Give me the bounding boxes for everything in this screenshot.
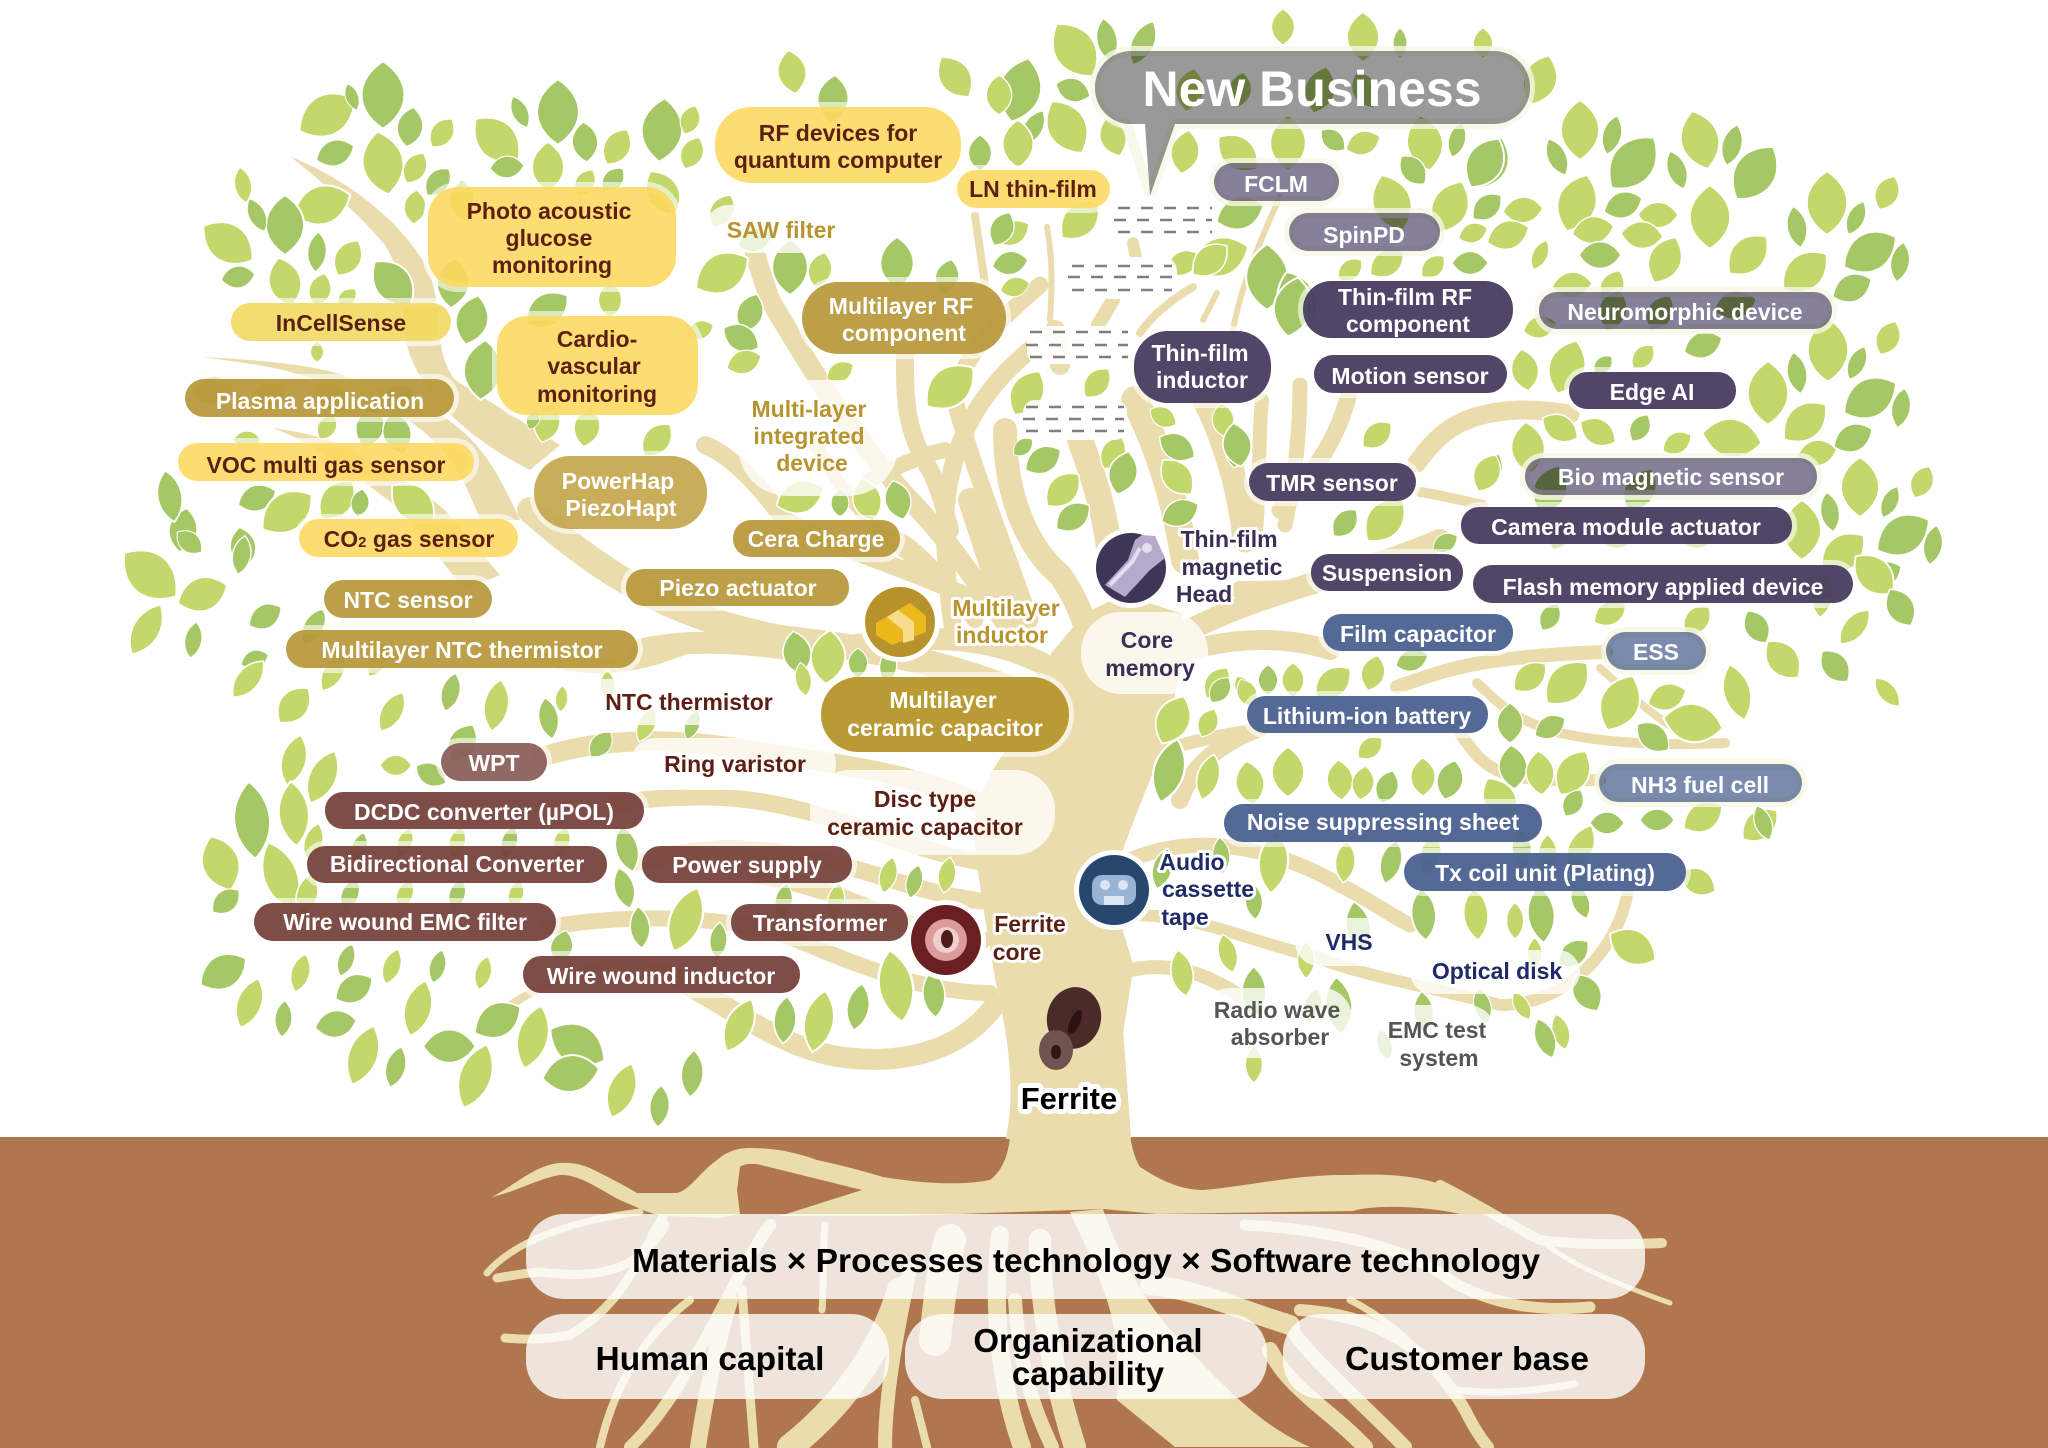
- label: Multi-layer integrated device: [751, 396, 867, 476]
- label: Multilayer RF component: Multilayer RF: [829, 293, 973, 319]
- label: Cardio-vascular monitoring: vascular: [547, 353, 641, 379]
- label: Suspension: Suspension: [1322, 560, 1452, 586]
- label: thin-film magnetic head: Thin-film: [1180, 526, 1278, 552]
- label: audio cassette tape: cassette: [1162, 876, 1254, 902]
- panel: human capital: Human capital: [596, 1340, 824, 1377]
- label: WPT: [441, 743, 547, 781]
- centre leaves: [1001, 363, 1053, 423]
- label: Thin-film RF component: [1303, 281, 1513, 338]
- label: DCDC converter: DCDC converter (µPOL): [354, 799, 614, 825]
- label: Noise suppressing sheet: [1224, 804, 1542, 842]
- panel: organizational capability: [905, 1314, 1267, 1399]
- label: EMC test system: EMC test: [1388, 1017, 1487, 1043]
- label: Noise suppressing sheet: Noise suppressing sheet: [1247, 809, 1519, 835]
- roots: [487, 1120, 1670, 1447]
- label: CO2 gas sensor: CO2 gas sensor: [324, 526, 494, 552]
- label: Disc type ceramic capacitor: [827, 786, 1023, 840]
- label: NTC thermistor: NTC thermistor: [605, 689, 773, 715]
- right-hand ribbons: [1170, 540, 1440, 640]
- label: audio cassette tape: tape: [1161, 904, 1209, 930]
- panel: customer base: [1283, 1314, 1645, 1399]
- label: Power supply: Power supply: [672, 852, 822, 878]
- label: Disc type ceramic capacitor: ceramic capacitor: [827, 814, 1023, 840]
- label: InCellSense: InCellSense: [276, 310, 406, 336]
- label: Multilayer NTC thermistor: Multilayer NTC thermistor: [321, 637, 603, 663]
- label: ESS: ESS: [1633, 639, 1679, 665]
- label: NTC sensor: [324, 580, 492, 618]
- ferrite core photo: [1039, 982, 1107, 1070]
- label: thin-film magnetic head: [1176, 526, 1283, 607]
- label: RF devices for quantum computer: quantum computer: [734, 147, 942, 173]
- dashed placeholder labels: [1023, 196, 1214, 440]
- label: Photo acoustic glucose monitoring: monitoring: [492, 252, 612, 278]
- label: Flash memory applied device: Flash memory applied device: [1503, 574, 1823, 600]
- label: Transformer: [731, 904, 908, 941]
- label: Edge AI: [1569, 372, 1736, 409]
- label: ferrite core: [993, 911, 1066, 965]
- label: Camera module actuator: [1461, 507, 1792, 544]
- icon: ferrite core: [906, 900, 986, 980]
- label: Lithium-ion battery: [1247, 696, 1488, 733]
- label: PowerHap PiezoHapt: [534, 456, 707, 529]
- label: NH3 fuel cell: [1599, 764, 1802, 802]
- label: ESS: [1606, 632, 1706, 670]
- label: multilayer inductor: [952, 595, 1060, 648]
- label: RF devices for quantum computer: [715, 107, 961, 183]
- label: ferrite core: Ferrite: [994, 911, 1066, 937]
- label: Camera module actuator: Camera module actuator: [1491, 514, 1761, 540]
- icon: multilayer inductor: [860, 582, 940, 662]
- label: Cardio-vascular monitoring: [497, 316, 698, 415]
- label: Motion sensor: Motion sensor: [1331, 363, 1489, 389]
- far-left, lower-left and far-right leaves: [110, 468, 1922, 1128]
- panel: human capital: [526, 1314, 889, 1399]
- panel: organizational capability: Organizational: [973, 1322, 1203, 1359]
- panel: organizational capability: capability: [1012, 1355, 1165, 1392]
- label: Wire wound EMC filter: Wire wound EMC filter: [283, 909, 527, 935]
- label: Bio magnetic sensor: Bio magnetic sensor: [1558, 464, 1784, 490]
- label: Radio wave absorber: [1214, 997, 1340, 1050]
- central ribbons: [945, 350, 1030, 640]
- label: Thin-film inductor: [1134, 331, 1271, 403]
- label: LN thin-film: LN thin-film: [969, 176, 1097, 202]
- faint label backgrounds: [575, 205, 1580, 1077]
- label: Core memory: [1105, 627, 1195, 681]
- icon: audio cassette tape: [1074, 850, 1154, 930]
- label: VOC multi gas sensor: [178, 443, 474, 481]
- label: Thin-film inductor: Thin-film: [1151, 340, 1249, 366]
- label: Bidirectional Converter: Bidirectional Converter: [330, 851, 584, 877]
- label: Core memory: memory: [1105, 655, 1195, 681]
- label: Multilayer ceramic capacitor: Multilayer: [889, 687, 997, 713]
- panel: customer base: Customer base: [1345, 1340, 1589, 1377]
- label: Film capacitor: [1323, 614, 1513, 651]
- label: VOC multi gas sensor: VOC multi gas sensor: [206, 452, 446, 478]
- upper centre canopy: [1040, 12, 1110, 88]
- label: Edge AI: Edge AI: [1610, 379, 1694, 405]
- right upper canopy: [1561, 100, 1599, 160]
- label: NTC sensor: NTC sensor: [343, 587, 473, 613]
- icon: thin-film magnetic head: [1091, 528, 1171, 608]
- label: Film capacitor: Film capacitor: [1340, 621, 1496, 647]
- label: Radio wave absorber: Radio wave: [1214, 997, 1340, 1023]
- label: Photo acoustic glucose monitoring: [428, 187, 676, 287]
- left upper canopy: [361, 61, 405, 129]
- label: audio cassette tape: Audio: [1159, 849, 1225, 875]
- label: TMR sensor: TMR sensor: [1266, 470, 1398, 496]
- label: multilayer inductor: Multilayer: [952, 595, 1060, 621]
- label: Thin-film inductor: inductor: [1156, 367, 1248, 393]
- label: Photo acoustic glucose monitoring: glucose: [506, 225, 592, 251]
- label: PowerHap PiezoHapt: PowerHap: [562, 468, 674, 494]
- label: LN thin-film: [957, 170, 1110, 208]
- label: CO2 gas sensor: [299, 519, 518, 557]
- label: SAW filter: SAW filter: [727, 217, 835, 243]
- label: Multilayer NTC thermistor: [286, 630, 638, 668]
- label: Suspension: [1311, 554, 1463, 591]
- label: Neuromorphic device: Neuromorphic device: [1567, 299, 1803, 325]
- label: Piezo actuator: [626, 569, 849, 606]
- label: Neuromorphic device: [1539, 292, 1832, 329]
- label: Cera Charge: Cera Charge: [748, 526, 884, 552]
- leaves: [165, 9, 1946, 850]
- label: Core memory: Core: [1121, 627, 1173, 653]
- label: Multilayer ceramic capacitor: ceramic capacitor: [847, 715, 1043, 741]
- label: Radio wave absorber: absorber: [1231, 1024, 1329, 1050]
- label: VHS: VHS: [1325, 929, 1373, 955]
- label: SpinPD: [1289, 213, 1440, 251]
- label: FCLM: FCLM: [1244, 171, 1308, 197]
- label: Thin-film RF component: Thin-film RF: [1338, 284, 1472, 310]
- label: Bio magnetic sensor: [1525, 458, 1817, 495]
- label: Bidirectional Converter: [307, 846, 607, 883]
- lower-left ribbons: [542, 741, 993, 810]
- label: Multilayer RF component: component: [842, 320, 966, 346]
- label: audio cassette tape: [1159, 849, 1254, 930]
- label: multilayer inductor: inductor: [956, 622, 1048, 648]
- label: WPT: WPT: [468, 750, 520, 776]
- label: Cera Charge: [733, 520, 900, 557]
- label: Lithium-ion battery: Lithium-ion battery: [1263, 703, 1471, 729]
- label: Cardio-vascular monitoring: Cardio-: [557, 326, 637, 352]
- label: Wire wound inductor: [523, 956, 800, 993]
- label: Multi-layer integrated device: device: [776, 450, 848, 476]
- tree and leaves: [110, 9, 1946, 1139]
- label: Multilayer RF component: [802, 282, 1006, 354]
- label: Multi-layer integrated device: integrated: [753, 423, 865, 449]
- new business callout: [1095, 51, 1530, 196]
- label: Photo acoustic glucose monitoring: Photo acoustic: [467, 198, 632, 224]
- label: thin-film magnetic head: magnetic: [1182, 554, 1283, 580]
- label: Cardio-vascular monitoring: monitoring: [537, 381, 657, 407]
- label: TMR sensor: [1249, 463, 1416, 501]
- label: RF devices for quantum computer: RF devices for: [759, 120, 917, 146]
- label: EMC test system: [1388, 1017, 1487, 1071]
- label: Wire wound inductor: Wire wound inductor: [547, 963, 775, 989]
- label: Wire wound EMC filter: [254, 903, 556, 941]
- label: FCLM: [1214, 163, 1339, 201]
- label: Plasma application: [185, 379, 454, 417]
- ground: [0, 1137, 2048, 1448]
- label: EMC test system: system: [1399, 1045, 1479, 1071]
- label: Plasma application: Plasma application: [216, 388, 424, 414]
- label: Motion sensor: [1314, 355, 1507, 393]
- label: NH3 fuel cell: NH3 fuel cell: [1631, 772, 1769, 798]
- label: Optical disk: Optical disk: [1432, 958, 1562, 984]
- label: ferrite core: core: [993, 939, 1041, 965]
- label: Multi-layer integrated device: Multi-layer: [751, 396, 867, 422]
- label: SpinPD: SpinPD: [1323, 222, 1405, 248]
- panel: materials, processes, software: Materials × Processes technology × Software technology: [632, 1242, 1541, 1279]
- new business callout: New Business: [1142, 61, 1482, 117]
- label: Power supply: [642, 846, 852, 883]
- label: Flash memory applied device: [1473, 565, 1853, 603]
- label: Piezo actuator: Piezo actuator: [659, 575, 817, 601]
- label: Multilayer ceramic capacitor: [821, 677, 1069, 752]
- label: Ring varistor: Ring varistor: [664, 751, 806, 777]
- panel: materials, processes, software: [526, 1214, 1645, 1299]
- upper-left tapered branch: [291, 157, 560, 470]
- label: Transformer: Transformer: [753, 910, 887, 936]
- label: Thin-film RF component: component: [1346, 311, 1470, 337]
- label: Tx coil unit (Plating): Tx coil unit (Plating): [1435, 860, 1655, 886]
- label: Tx coil unit (Plating): [1404, 853, 1686, 891]
- label: thin-film magnetic head: Head: [1176, 581, 1232, 607]
- label: InCellSense: [231, 303, 451, 341]
- label: DCDC converter: [325, 792, 644, 829]
- label: Disc type ceramic capacitor: Disc type: [874, 786, 976, 812]
- label: PowerHap PiezoHapt: PiezoHapt: [565, 495, 677, 521]
- label: Ferrite: Ferrite: [1021, 1081, 1117, 1116]
- trunk and branches: [203, 157, 1725, 1139]
